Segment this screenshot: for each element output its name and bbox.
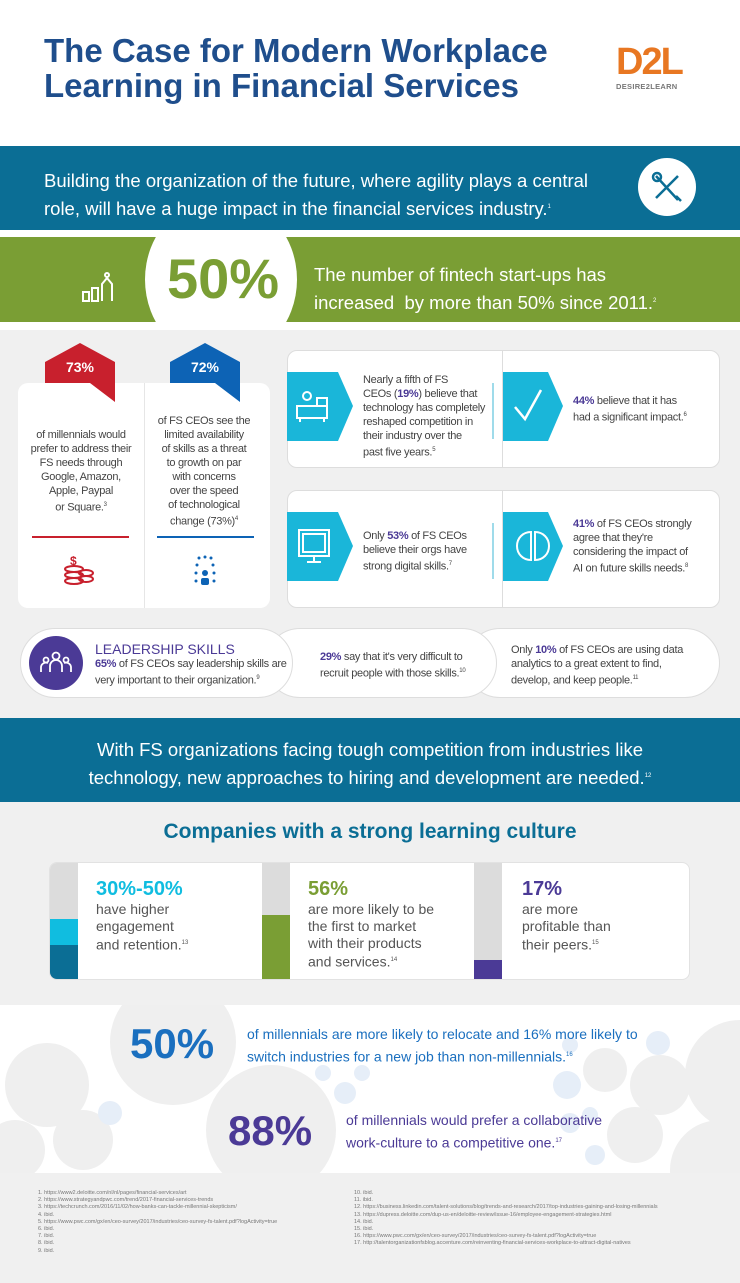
text 44%: 44% believe that it has — [573, 395, 677, 407]
leadership text: LEADERSHIP SKILLS — [95, 641, 235, 657]
leadership text: 65% of FS CEOs say leadership skills are — [95, 658, 287, 670]
stat 56: with their products — [308, 935, 422, 951]
text 41%: considering the impact of — [573, 546, 688, 558]
text 19% — [363, 374, 486, 459]
footnotes: 2. https://www.strategyandpwc.com/trend/2017-financial-services-trends — [38, 1197, 213, 1203]
footnotes: 1. https://www2.deloitte.com/nl/nl/pages/financial-services/art — [38, 1190, 187, 1196]
text: 15. ibid. — [354, 1226, 373, 1232]
pill: 10% data analytics: analytics to a great extent to find, — [511, 658, 662, 670]
icon: coins — [64, 555, 94, 585]
stat 56: and services.14 — [308, 954, 397, 970]
text 53%: believe their orgs have — [363, 544, 467, 556]
stat 17: are more — [522, 901, 578, 917]
text: millennials 73: or Square.3 — [55, 502, 107, 514]
text 44%: had a significant impact.6 — [573, 412, 687, 424]
panel: card CEO tech — [287, 350, 720, 468]
text: millennials 73: FS needs through — [40, 457, 122, 469]
bar 1 — [50, 863, 78, 981]
stat 17 — [522, 878, 611, 953]
text: CEOs 72: of skills as a threat — [162, 443, 246, 455]
stat 30-50: and retention.13 — [96, 937, 188, 953]
panel: learning culture cards — [49, 862, 690, 980]
footnotes: 9. ibid. — [38, 1248, 54, 1254]
heading learning culture: Companies with a strong learning culture — [163, 820, 577, 843]
bar 2 — [262, 863, 290, 981]
text: millennials 73: of millennials would — [36, 429, 126, 441]
stat 17: profitable than — [522, 918, 611, 934]
text: CEOs 72: over the speed — [170, 485, 238, 497]
footnotes: 8. ibid. — [38, 1240, 54, 1246]
panel: millennials: of millennials are more likely to relocate and 16% more likely to — [247, 1026, 638, 1042]
text 44% — [573, 395, 687, 424]
text: CEOs 72: limited availability — [164, 429, 244, 441]
panel: millennials: of millennials would prefer a collaborative — [346, 1112, 602, 1128]
text 19%: their industry over the — [363, 430, 462, 442]
text 19%: past five years.5 — [363, 447, 435, 459]
text: millennials 73: Google, Amazon, — [41, 471, 121, 483]
icon: tools — [638, 158, 696, 216]
text: CEOs 72: of FS CEOs see the — [158, 415, 250, 427]
panel: millennials: switch industries for a new job than non-millennials.16 — [247, 1049, 573, 1065]
fintech text: The number of fintech start-ups has — [314, 264, 606, 285]
text: 13. https://dupress.deloitte.com/dup-us-en/deloitte-review/issue-16/employee-engagement-strategies.html — [354, 1212, 611, 1218]
footnotes — [38, 1190, 277, 1254]
text 41%: agree that they're — [573, 532, 653, 544]
text: 10. ibid. — [354, 1190, 373, 1196]
blue band intro — [0, 146, 740, 230]
blue line — [157, 536, 254, 538]
title — [44, 32, 548, 104]
stat 56 — [308, 878, 434, 970]
fintech text — [314, 264, 656, 313]
panel: card digital skills — [287, 490, 720, 608]
text: 17. http://talentorganizationfsblog.accenture.com/reinventing-financial-services-workplace-to-attract-digital-natives — [354, 1240, 631, 1246]
text: millennials 73: prefer to address their — [31, 443, 131, 455]
chevron icon brain — [503, 512, 563, 581]
title: Learning in Financial Services — [44, 67, 519, 104]
stat 56: 56% — [308, 878, 348, 900]
stat 30-50 — [96, 878, 188, 953]
chevron icon check — [503, 372, 563, 441]
pill: leadership skills — [20, 628, 293, 698]
intro text — [44, 170, 588, 219]
icon: growth chart — [82, 272, 113, 302]
text: CEOs 72: to growth on par — [167, 457, 241, 469]
stat 56: the first to market — [308, 918, 416, 934]
text: 11. ibid. — [354, 1197, 373, 1203]
green band stat — [0, 237, 740, 322]
fintech text: increased by more than 50% since 2011.2 — [314, 292, 656, 313]
chevron icon monitor — [287, 512, 353, 581]
panel: millennials — [0, 1005, 740, 1173]
text: millennials 73 — [31, 429, 132, 514]
pill: 10% data analytics: Only 10% of FS CEOs are using data — [511, 644, 683, 656]
white circle — [145, 197, 297, 362]
text: 12. https://business.linkedin.com/talent-solutions/blog/trends-and-research/2017/top-industries-gaining-and-losing-millennials — [354, 1204, 658, 1210]
blue band competition — [0, 718, 740, 802]
text: millennials 73: Apple, Paypal — [49, 485, 113, 497]
stat 17: 17% — [522, 878, 562, 900]
blue band competition: With FS organizations facing tough competition from industries like — [97, 739, 643, 760]
text 41%: 41% of FS CEOs strongly — [573, 518, 691, 530]
pill: 29%: recruit people with those skills.10 — [320, 668, 465, 680]
text: CEOs 72: change (73%)4 — [170, 516, 238, 528]
stat 17: their peers.15 — [522, 937, 599, 953]
stat 30-50: 30%-50% — [96, 878, 183, 900]
text: 16. https://www.pwc.com/gx/en/ceo-survey/2017/industries/ceo-survey-fs-talent.pdf?logActivity=true — [354, 1233, 596, 1239]
chevron icon desk — [287, 372, 353, 441]
text 53% — [363, 530, 467, 573]
bar 3 — [474, 863, 502, 981]
big 50%: 50% — [167, 247, 279, 310]
white gap — [0, 230, 740, 330]
footnotes: 3. https://techcrunch.com/2016/11/02/how-banks-can-tackle-millennial-skepticism/ — [38, 1204, 237, 1210]
badge 73%: 73% — [66, 359, 95, 375]
text 41%: AI on future skills needs.8 — [573, 563, 688, 575]
stat 50% relocate: 50% — [130, 1020, 214, 1067]
stat 88%: 88% — [228, 1107, 312, 1154]
blue band competition: technology, new approaches to hiring and development are needed.12 — [89, 767, 651, 788]
text 19%: technology has completely — [363, 402, 485, 414]
leadership text: very important to their organization.9 — [95, 675, 259, 687]
pill: 29% — [265, 628, 497, 698]
text 53%: Only 53% of FS CEOs — [363, 530, 467, 542]
pill: 10% data analytics: develop, and keep people.11 — [511, 675, 638, 687]
text 19%: CEOs (19%) believe that — [363, 388, 477, 400]
text 41% — [573, 518, 692, 575]
text 53%: strong digital skills.7 — [363, 561, 452, 573]
stat 30-50: have higher — [96, 901, 169, 917]
text: CEOs 72: with concerns — [172, 471, 236, 483]
logo: D2L — [616, 41, 682, 83]
red line — [32, 536, 129, 538]
footnotes: 4. ibid. — [38, 1212, 54, 1218]
intro text: Building the organization of the future, where agility plays a central — [44, 170, 588, 191]
panel: left stats card — [18, 383, 270, 608]
pill: 10% data analytics — [465, 628, 720, 698]
text: 14. ibid. — [354, 1219, 373, 1225]
stat 56: are more likely to be — [308, 901, 434, 917]
leadership text — [95, 641, 287, 687]
panel: millennials: work-culture to a competitive one.17 — [346, 1135, 562, 1151]
badge 73% — [45, 343, 115, 402]
text 19%: Nearly a fifth of FS — [363, 374, 448, 386]
text: CEOs 72: of technological — [168, 499, 240, 511]
footnotes: 6. ibid. — [38, 1226, 54, 1232]
badge 72% — [170, 343, 240, 402]
pill: 29%: 29% say that it's very difficult to — [320, 651, 462, 663]
stat 30-50: engagement — [96, 918, 174, 934]
footnotes: 5. https://www.pwc.com/gx/en/ceo-survey/2017/industries/ceo-survey-fs-talent.pdf?logActivity=true — [38, 1219, 277, 1225]
intro text: role, will have a huge impact in the financial services industry.1 — [44, 198, 551, 219]
logo: DESIRE2LEARN — [616, 82, 678, 91]
icon: person dotted — [194, 556, 216, 585]
badge 72%: 72% — [191, 359, 220, 375]
text: CEOs 72 — [158, 415, 250, 528]
header — [0, 0, 740, 146]
icon: people circle — [29, 636, 83, 690]
text 19%: reshaped competition in — [363, 416, 473, 428]
title: The Case for Modern Workplace — [44, 32, 548, 69]
footnotes: 7. ibid. — [38, 1233, 54, 1239]
